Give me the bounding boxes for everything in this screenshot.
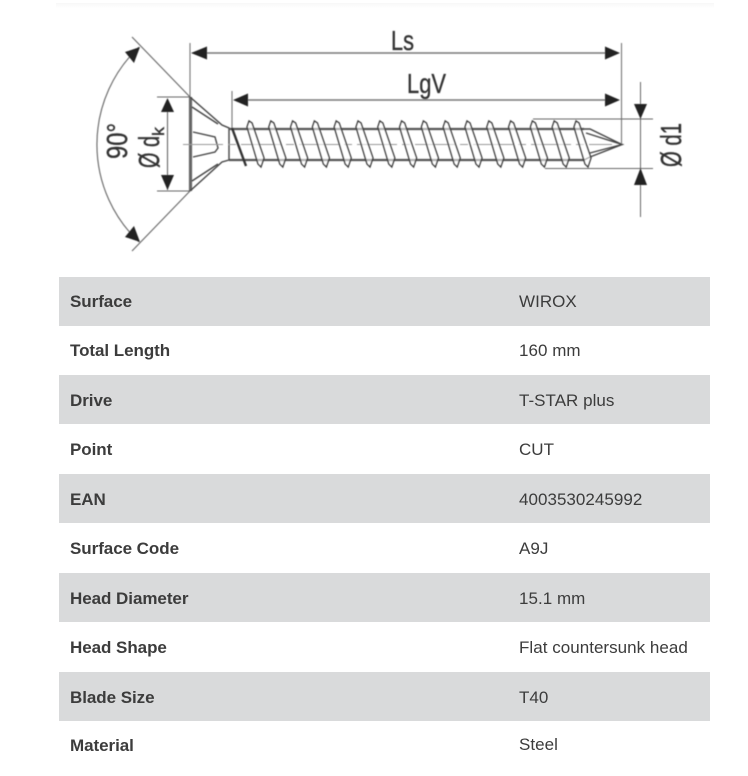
screw shank (229, 129, 584, 160)
row: Total Length (70, 341, 581, 360)
row: Drive (59, 375, 710, 424)
row: Point: Point (70, 440, 112, 459)
row: Surface: Surface (70, 292, 132, 311)
row: Surface Code: Surface Code (70, 539, 179, 558)
row: Blade Size: Blade Size (70, 688, 155, 707)
row: Total Length: 160 mm (519, 341, 581, 360)
row: Surface (59, 277, 710, 326)
row: Point: CUT (519, 440, 554, 459)
row: Material: Steel (519, 735, 558, 754)
centre line (183, 144, 612, 146)
dimension: LgV (232, 68, 620, 128)
row: EAN (59, 474, 710, 523)
screw point (584, 129, 622, 160)
dimension: head diameter dk (134, 97, 190, 191)
row: Head Diameter (59, 573, 710, 622)
dimension: Ls (190, 25, 622, 144)
dimension: shank diameter d1 (533, 82, 688, 217)
screw drawing (183, 97, 622, 191)
dimension: head diameter dk: Ø d (134, 136, 166, 168)
dimension: 90 degree head angle (97, 37, 190, 251)
screw threads (232, 121, 591, 167)
row: Drive: T-STAR plus (519, 391, 614, 410)
row: EAN: EAN (70, 490, 106, 509)
row: Surface Code (70, 539, 548, 558)
row: Head Shape (70, 638, 688, 657)
row: Blade Size (59, 672, 710, 721)
dimension: 90 degree head angle: 90° (102, 123, 134, 159)
screw head (190, 97, 229, 191)
row: Material (70, 735, 558, 755)
row: Surface: WIROX (519, 292, 577, 311)
screw technical diagram (96, 25, 688, 252)
specification table (59, 277, 710, 755)
row: Head Shape: Head Shape (70, 638, 167, 657)
row: Total Length: Total Length (70, 341, 170, 360)
row: Head Diameter: 15.1 mm (519, 589, 585, 608)
row: Head Diameter: Head Diameter (70, 589, 188, 608)
dimension: shank diameter d1: Ø d1 (656, 123, 688, 167)
row: Head Shape: Flat countersunk head (519, 638, 688, 657)
row: Point (70, 440, 554, 459)
row: Surface Code: A9J (519, 539, 548, 558)
row: Drive: Drive (70, 391, 112, 410)
row: Material: Material (70, 736, 134, 755)
dimension: head diameter dk: k (149, 126, 168, 136)
dimension: LgV: LgV (407, 68, 446, 99)
dimension: Ls: Ls (391, 25, 414, 56)
row: EAN: 4003530245992 (519, 490, 642, 509)
row: Blade Size: T40 (519, 688, 548, 707)
